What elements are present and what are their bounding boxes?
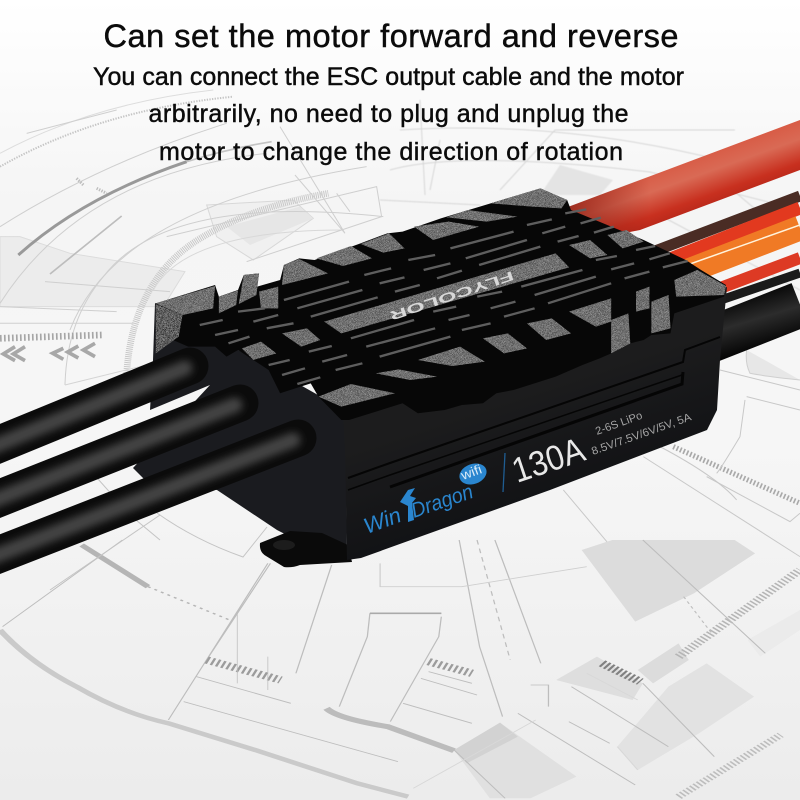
ESC heatsink top xyxy=(156,188,726,420)
heatsink rib lines xyxy=(200,209,688,384)
background: technical drawing lower right xyxy=(563,350,800,557)
cables: signal wires xyxy=(655,196,800,340)
label: wifi badge: wifi xyxy=(458,462,484,483)
brand text on heatsink: FLYCOLOR xyxy=(387,268,516,324)
background: technical drawing upper right xyxy=(380,100,800,290)
label: WinDragon logo xyxy=(360,480,476,539)
label: WinDragon logo: Win xyxy=(360,502,404,539)
ESC left side face xyxy=(133,303,347,560)
label: battery range: 2-6S LiPo xyxy=(594,410,644,438)
label: wifi badge xyxy=(456,460,490,488)
description line 3: motor to change the direction of rotation xyxy=(159,138,623,166)
heatsink textured patches xyxy=(156,188,726,407)
title: Can set the motor forward and reverse xyxy=(104,18,678,54)
ESC front face grooves xyxy=(348,337,720,490)
description line 2: arbitrarily, no need to plug and unplug the xyxy=(148,100,628,128)
cable: thick red power wire xyxy=(568,120,800,240)
background: technical drawing upper left xyxy=(0,90,383,385)
product label on ESC xyxy=(360,410,694,539)
label: divider xyxy=(503,453,505,492)
heatsink black base xyxy=(156,188,726,420)
background: technical drawing bottom xyxy=(0,540,800,798)
cables: three black motor wires xyxy=(0,366,298,558)
background: arcs below the left cables xyxy=(50,470,267,590)
ESC body front face xyxy=(318,287,727,560)
ESC mounting tab xyxy=(260,531,352,567)
label: WinDragon logo: Dragon xyxy=(408,480,476,523)
label: current rating: 130A xyxy=(507,430,590,491)
description line 1: You can connect the ESC output cable and the motor xyxy=(93,63,684,91)
label: BEC voltages: 8.5V/7.5V/6V/5V, 5A xyxy=(590,411,694,458)
